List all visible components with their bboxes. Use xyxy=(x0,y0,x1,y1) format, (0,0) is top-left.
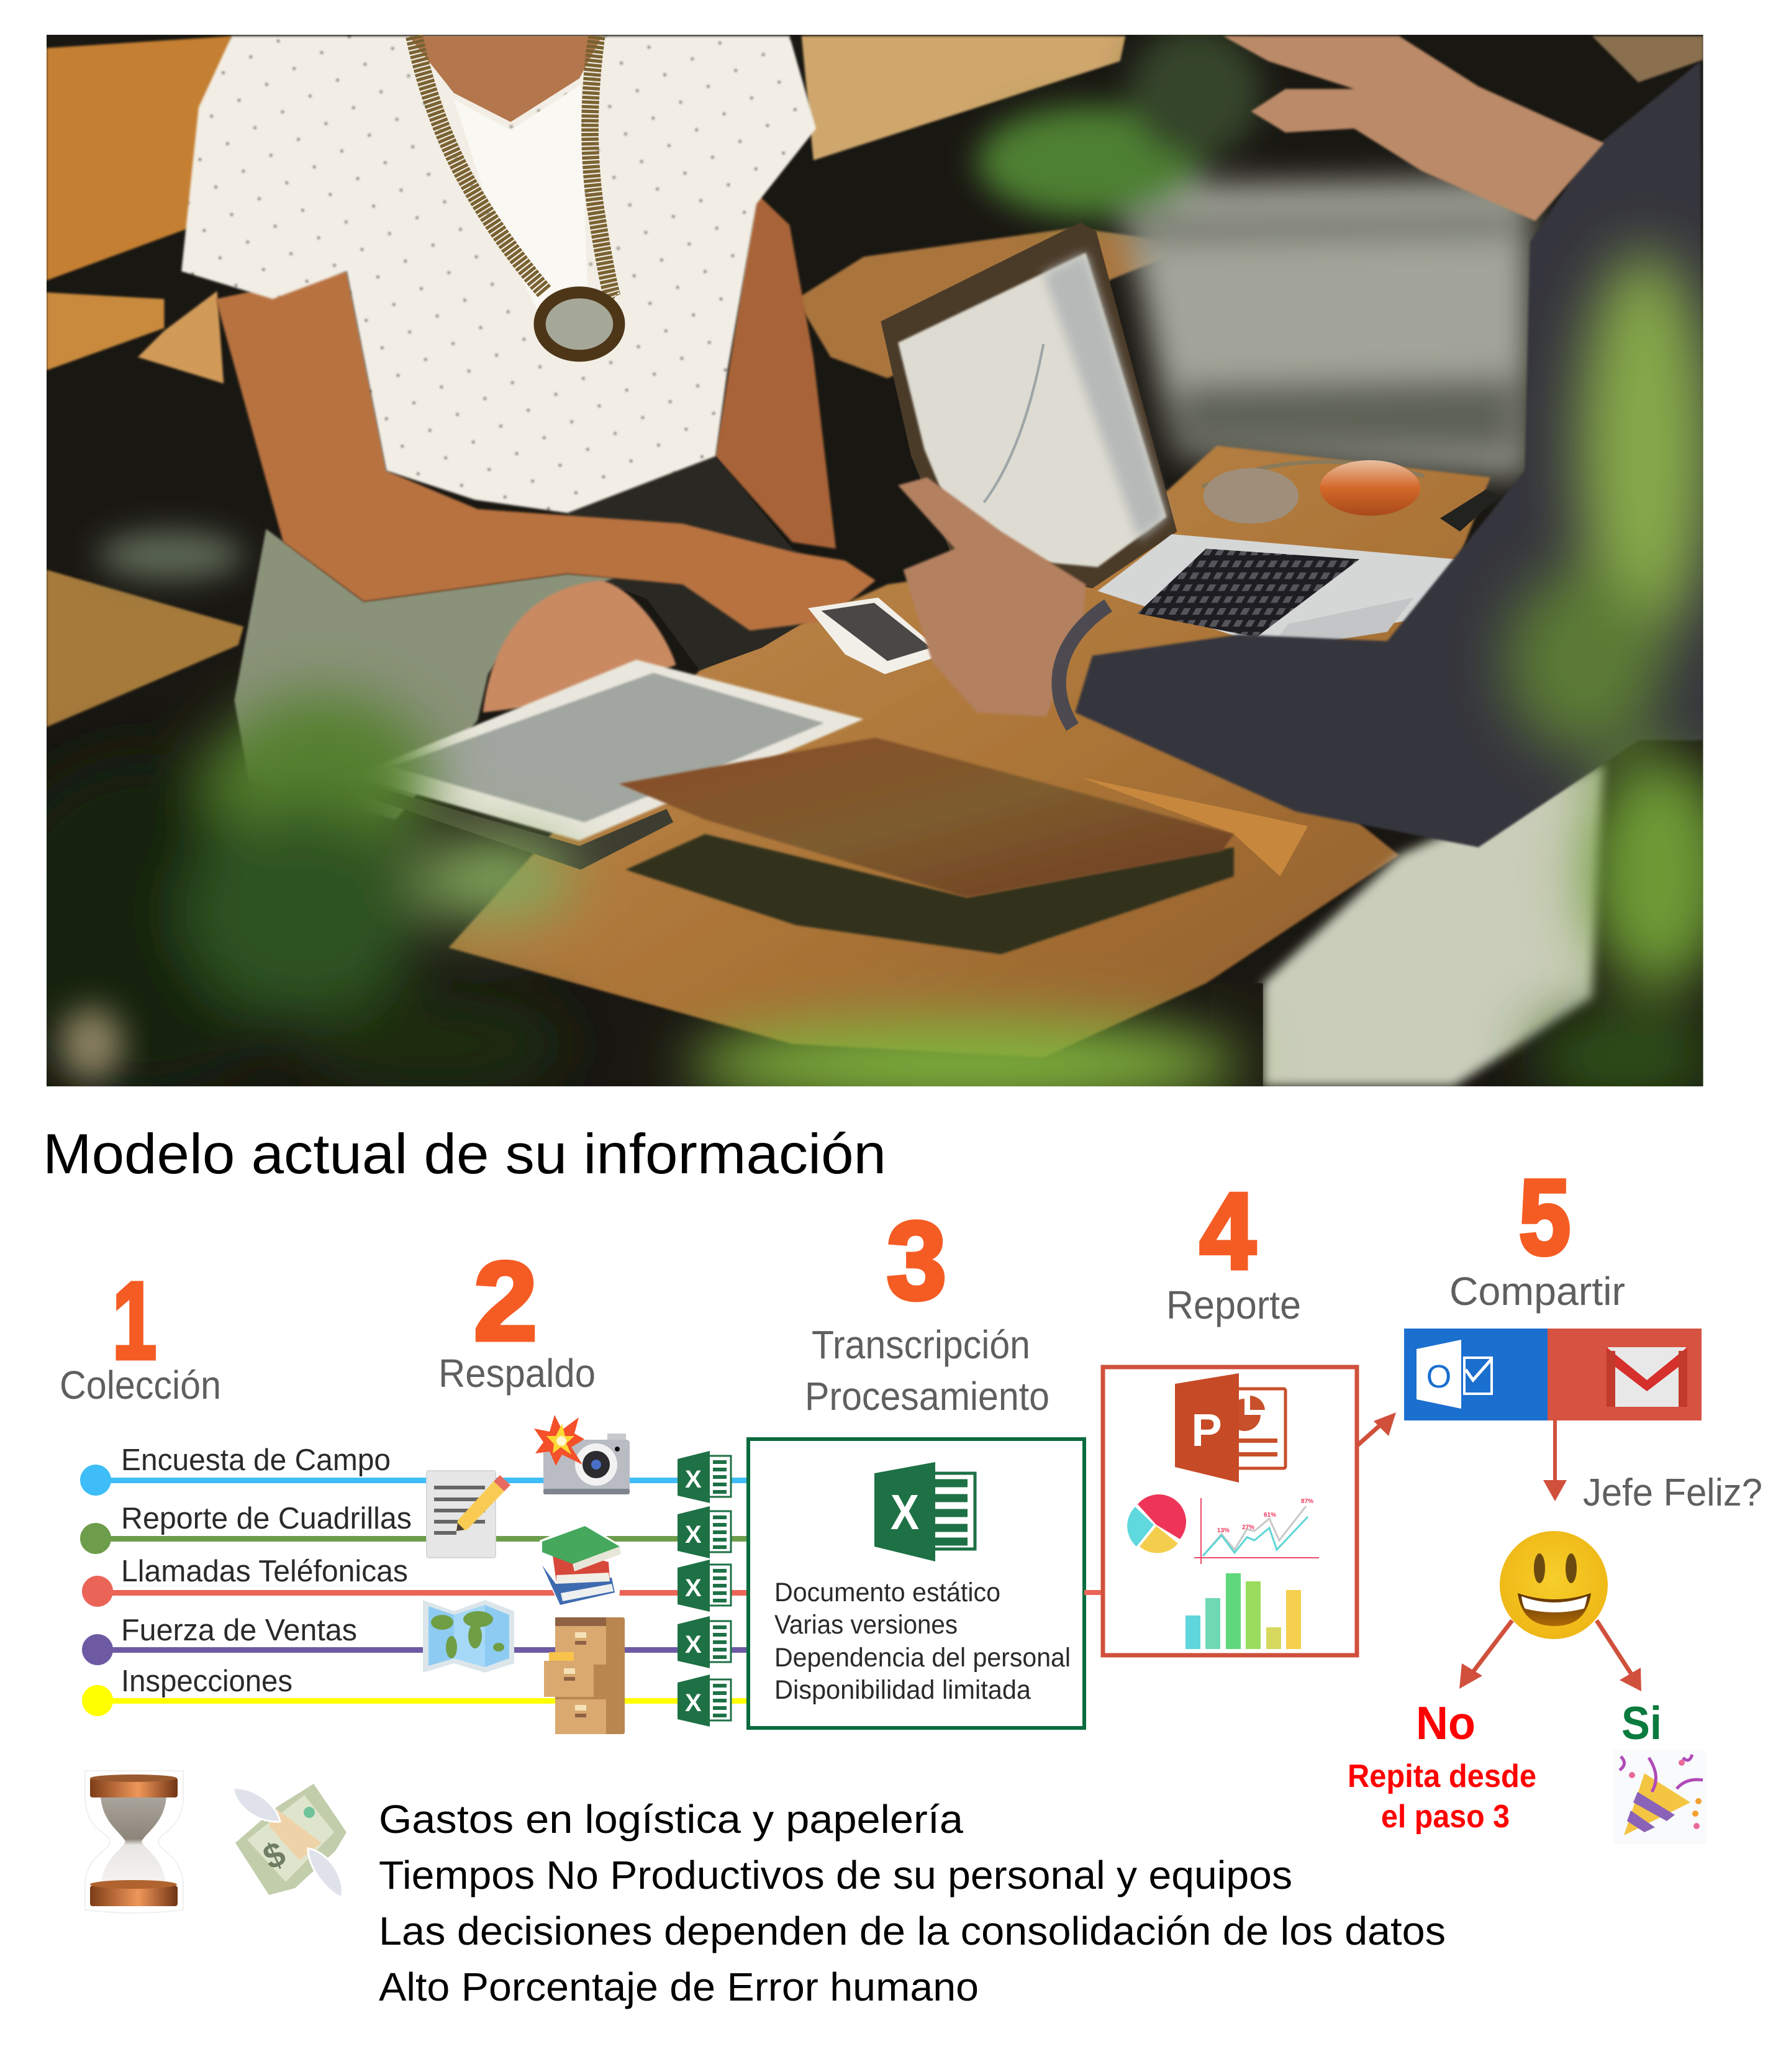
outcome: No: No xyxy=(1416,1697,1475,1749)
data source: Inspecciones: Inspecciones xyxy=(121,1665,292,1698)
data source: Reporte de Cuadrillas xyxy=(80,1502,746,1554)
data source: Llamadas Teléfonicas xyxy=(82,1555,746,1607)
arrow: report to share xyxy=(1358,1412,1396,1445)
sunglasses xyxy=(1202,460,1424,524)
icon: money with wings xyxy=(233,1780,349,1898)
panel: Outlook tile xyxy=(1404,1329,1548,1420)
arrow: share to decision xyxy=(1543,1420,1567,1501)
arrow: to Si xyxy=(1597,1620,1641,1691)
icon: Excel file 2: X xyxy=(685,1521,702,1548)
shirt placket xyxy=(454,85,587,317)
title: Modelo actual de su información xyxy=(43,1123,886,1186)
outcome: No: Repita desde xyxy=(1348,1758,1536,1794)
icon: large Excel logo: X xyxy=(891,1484,919,1540)
pie chart xyxy=(1127,1494,1186,1553)
icon: Excel file 4 xyxy=(678,1616,731,1668)
question text: Jefe Feliz? xyxy=(1583,1471,1762,1514)
table xyxy=(448,445,1490,1057)
icon: world map xyxy=(423,1600,514,1673)
text block: consequences xyxy=(379,1797,1446,2009)
icon: Excel file 5: X xyxy=(685,1689,702,1717)
white phone xyxy=(808,598,945,674)
icon: Excel file 4: X xyxy=(685,1631,702,1658)
icon: stack of books xyxy=(540,1522,625,1609)
knee xyxy=(483,580,676,712)
panel: Gmail tile xyxy=(1548,1329,1702,1420)
panel text: document limitations: Dependencia del personal xyxy=(774,1643,1071,1673)
icon: PowerPoint logo xyxy=(1175,1373,1285,1483)
icon: Excel file 1 xyxy=(678,1451,731,1503)
phone on table xyxy=(1440,489,1500,532)
step 3 label: Transcripción xyxy=(812,1322,1030,1367)
pavement xyxy=(1263,763,1604,1086)
icon: Excel file 1: X xyxy=(685,1466,702,1493)
folder xyxy=(626,834,1234,954)
icon: filing cabinet xyxy=(544,1617,625,1734)
icon: large Excel logo xyxy=(874,1462,975,1561)
icon: Excel file 5 xyxy=(678,1674,731,1727)
panel text: document limitations: Disponibilidad limitada xyxy=(774,1675,1031,1705)
arrow: to No xyxy=(1459,1620,1512,1689)
step 4 number: 4 xyxy=(1200,1170,1256,1291)
icon: camera with flash xyxy=(534,1415,630,1494)
panel text: document limitations xyxy=(774,1578,1071,1705)
data source: Reporte de Cuadrillas: Reporte de Cuadrillas xyxy=(121,1502,412,1535)
outcome: No: el paso 3 xyxy=(1381,1799,1510,1835)
text block: consequences: Alto Porcentaje de Error humano xyxy=(379,1965,979,2009)
data source: Encuesta de Campo: Encuesta de Campo xyxy=(121,1443,391,1477)
jacket xyxy=(1075,61,1703,847)
step 2 number: 2 xyxy=(474,1239,537,1364)
data source: Fuerza de Ventas xyxy=(82,1614,746,1665)
icon: Excel file 3: X xyxy=(685,1574,702,1602)
step 5 label: Compartir xyxy=(1449,1269,1625,1314)
data source: Inspecciones xyxy=(82,1665,746,1716)
step 4 label: Reporte xyxy=(1166,1283,1301,1327)
line chart: 27% xyxy=(1242,1524,1254,1531)
laptop base and keyboard xyxy=(1098,534,1456,645)
data source: Fuerza de Ventas: Fuerza de Ventas xyxy=(121,1614,357,1647)
icon: hourglass xyxy=(85,1771,183,1913)
skirt xyxy=(234,529,614,819)
step 3 number: 3 xyxy=(887,1199,946,1322)
man hand xyxy=(898,478,1086,717)
far arm of woman xyxy=(715,193,836,548)
step 3 label xyxy=(805,1322,1049,1419)
raised hand xyxy=(1223,36,1604,221)
step 5 number: 5 xyxy=(1519,1158,1571,1277)
text block: consequences: Las decisiones dependen de la consolidación de los datos xyxy=(379,1909,1446,1953)
step 3 label: Procesamiento xyxy=(805,1374,1049,1419)
dark skirt xyxy=(568,456,804,670)
watch xyxy=(1059,606,1108,727)
line chart: 61% xyxy=(1264,1512,1276,1519)
panel text: document limitations: Varias versiones xyxy=(774,1610,958,1640)
panel: Outlook tile: O xyxy=(1426,1359,1451,1395)
connector: Excel to report xyxy=(1084,1590,1103,1595)
line chart: 13% xyxy=(1217,1527,1230,1534)
data source: Encuesta de Campo xyxy=(80,1443,746,1496)
necklace xyxy=(414,36,614,299)
icon: PowerPoint logo: P xyxy=(1191,1404,1222,1456)
photo: business meeting at an outdoor table xyxy=(0,27,1731,1109)
step 2 label: Respaldo xyxy=(438,1351,596,1396)
outcome: No xyxy=(1348,1697,1536,1835)
icon: Excel file 2 xyxy=(678,1506,731,1558)
text block: consequences: Gastos en logística y papelería xyxy=(379,1797,963,1842)
data source: Llamadas Teléfonicas: Llamadas Teléfonicas xyxy=(121,1555,408,1588)
neck skin xyxy=(409,36,602,122)
icon: party popper xyxy=(1613,1750,1706,1844)
text block: consequences: Tiempos No Productivos de su personal y equipos xyxy=(379,1853,1292,1897)
icon: smiley xyxy=(1500,1531,1608,1639)
bar chart xyxy=(1185,1573,1301,1649)
line chart: 87% xyxy=(1301,1498,1313,1505)
line chart xyxy=(1194,1498,1319,1564)
outcome: Si: Si xyxy=(1621,1697,1662,1749)
panel text: document limitations: Documento estático xyxy=(774,1578,1000,1607)
step 1 number: 1 xyxy=(112,1260,156,1382)
icon: money with wings: $ xyxy=(257,1833,291,1877)
icon: document and pencil xyxy=(427,1471,510,1558)
tablet xyxy=(352,660,864,840)
icon: Excel file 3 xyxy=(678,1560,731,1612)
panel: Excel processing xyxy=(748,1439,1084,1728)
foreground foliage xyxy=(0,252,1731,1109)
laptop screen xyxy=(881,222,1177,588)
arm and hand of woman xyxy=(216,271,876,630)
panel: PowerPoint report xyxy=(1103,1367,1357,1655)
step 1 label: Colección xyxy=(60,1363,221,1407)
shirt xyxy=(181,36,816,513)
